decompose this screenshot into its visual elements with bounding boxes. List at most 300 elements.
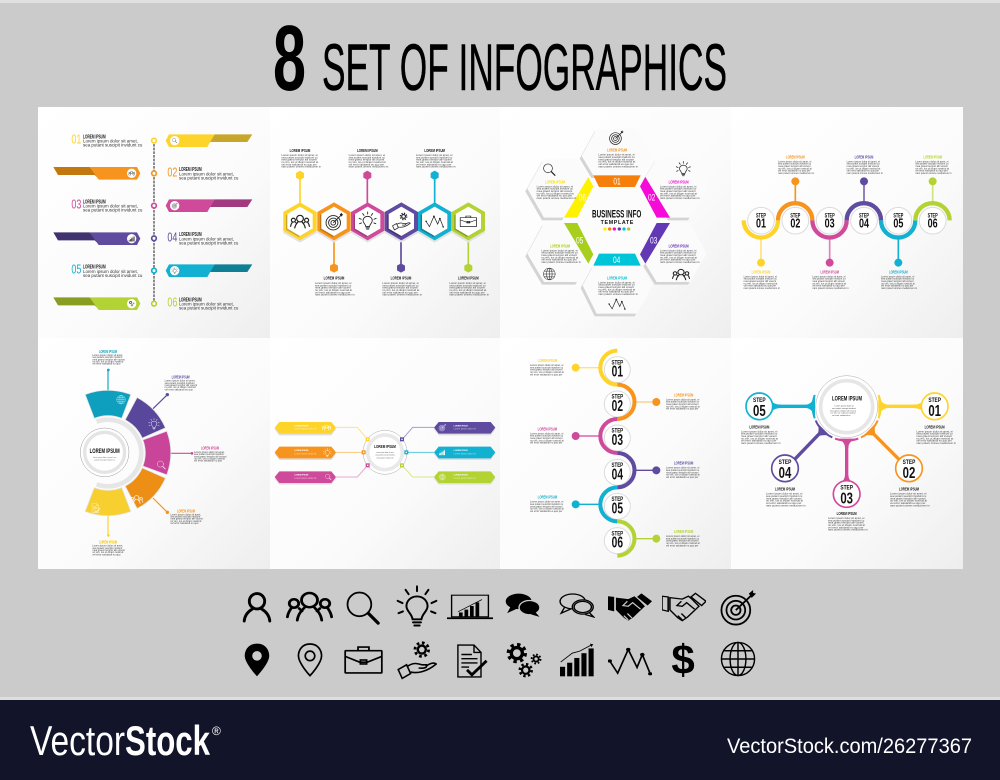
wave arcs [744, 203, 950, 237]
hexagon label 2: LOREM IPSUM [324, 276, 344, 281]
hexagon label 6: sea putant suscipit invidunt cu [449, 283, 486, 287]
label 01: sea putant suscipit invidunt cu [598, 155, 635, 159]
step text 3: LOREM IPSUM [538, 426, 557, 431]
band 01: 01 [613, 176, 621, 186]
pill teal: Lorem ipsum dolor sit [454, 451, 476, 455]
wave label 2: Lorem ipsum dolor sit amet, ei [778, 160, 812, 163]
icon: target [721, 590, 756, 625]
hexagon label 3: LOREM IPSUM [357, 148, 378, 153]
wave label 2 [778, 155, 815, 175]
wave label 3: mea graeci tempor alii vocent [812, 280, 845, 283]
step text 1: sea putant suscipit invidunt cu [530, 366, 564, 369]
radial label purple: vel error salutandi eu quo [165, 388, 193, 391]
step labels: STEP [893, 213, 903, 219]
icon: zigzag [608, 648, 652, 675]
spoke label 01 [916, 424, 956, 445]
step text 1: mea graeci tempor alii vocent [530, 369, 563, 372]
label 03: nam putent omnes mediocrem in [660, 260, 700, 264]
band 02: 02 [648, 192, 655, 202]
hexagon label 5: vel error salutandi eu quo per [416, 162, 451, 166]
hexagon label 2: vel error salutandi eu quo per [315, 290, 350, 294]
band 03: 03 [650, 235, 657, 245]
step text 4: sea putant suscipit invidunt cu [666, 469, 700, 472]
top light strip [0, 0, 1000, 3]
ribbon 3 magenta [166, 199, 252, 212]
connectors [300, 175, 468, 268]
spoke label 05 [741, 424, 781, 445]
segment purple [126, 398, 165, 438]
hexagon 4 purple [385, 202, 418, 240]
wave label 6: sea putant suscipit invidunt cu [915, 163, 949, 166]
step text 4: no vim, ius ut dicam nostrud at [666, 474, 700, 477]
band 01 [593, 175, 641, 187]
step labels: STEP [611, 428, 624, 435]
hexagon label 1: mea graeci tempor alii vocent [281, 158, 317, 162]
wave label 3: LOREM IPSUM [820, 270, 839, 275]
timeline text 06 [167, 295, 239, 311]
center heading: TEMPLATE [601, 220, 634, 226]
wave label 1: nam putent omnes mediocrem in [744, 287, 780, 290]
pill orange [275, 447, 336, 458]
step labels: 03 [825, 216, 835, 231]
pill yellow: Lorem ipsum dolor sit [294, 427, 317, 431]
wave label 6: LOREM IPSUM [923, 155, 942, 160]
wave label 1: Lorem ipsum dolor sit amet, ei [744, 275, 777, 278]
radial label magenta: vel error salutandi eu quo [194, 460, 223, 463]
timeline text 05 [71, 263, 143, 278]
wave label 5: mea graeci tempor alii vocent [881, 280, 914, 283]
icon: people [287, 593, 332, 620]
hexagon shadows [525, 131, 705, 316]
spoke label 04: sea putant suscipit invidunt cu [766, 494, 803, 498]
spoke label 02 [890, 487, 930, 507]
step text 6 [666, 529, 700, 547]
step 05 node [746, 393, 773, 420]
panel: hexagon chain [270, 107, 502, 338]
label 03: mea graeci tempor alii vocent [660, 253, 696, 257]
hexagon 6 green [452, 202, 485, 240]
wave label 1: sea putant suscipit invidunt cu [744, 278, 777, 281]
wave label 2: sea putant suscipit invidunt cu [778, 163, 812, 166]
wave label 2: no vim, ius ut dicam nostrud at [778, 167, 812, 170]
timeline text 05: 05 [71, 263, 81, 277]
step text 5: Lorem ipsum dolor sit amet, ei [530, 501, 564, 504]
hexagon label 5: no vim, ius ut dicam nostrud at [416, 160, 453, 164]
spoke label 05: nam putent omnes mediocrem in [741, 441, 781, 445]
radial label magenta: sea putant suscipit invidunt [194, 453, 224, 456]
spoke label 05: mea graeci tempor alii vocent [741, 434, 777, 438]
radial label orange: sea putant suscipit invidunt [170, 515, 200, 518]
wave label 5: Lorem ipsum dolor sit amet, ei [881, 275, 915, 278]
segment magenta [143, 432, 170, 474]
white hexagons [527, 129, 707, 314]
spoke label 01: nam putent omnes mediocrem in [916, 441, 956, 445]
segment icons [92, 395, 165, 513]
radial label yellow: vel error salutandi eu quo [92, 553, 121, 556]
spoke label 02: mea graeci tempor alii vocent [890, 496, 926, 500]
radial label magenta: Lorem ipsum dolor sit amet, [194, 451, 225, 454]
label 02 [660, 179, 700, 200]
hexagon label 1: nam putent omnes mediocrem in [281, 165, 321, 169]
step labels [611, 359, 624, 552]
radial label orange: vel error salutandi eu quo [170, 522, 199, 525]
label 01: no vim, ius ut dicam nostrud at [598, 160, 635, 164]
label 04 [598, 275, 638, 296]
step text 3: no vim, ius ut dicam nostrud at [530, 439, 564, 442]
timeline text 03: LOREM IPSUM [83, 199, 106, 205]
radial label teal: LOREM IPSUM [99, 349, 117, 354]
footer logo: Stock [125, 717, 210, 764]
hexagon label 3: sea putant suscipit invidunt cu [349, 155, 385, 159]
icon: globe [721, 642, 755, 676]
band 03 [640, 223, 670, 264]
hexagon label 4: no vim, ius ut dicam nostrud at [382, 288, 419, 292]
ribbon 2 orange [53, 167, 140, 180]
hexagon label 6: nam putent omnes mediocrem in [449, 293, 489, 297]
step text 6: LOREM IPSUM [674, 529, 693, 534]
icon: chat outline [560, 594, 594, 617]
segment orange [126, 468, 165, 508]
icon row 1 [244, 586, 756, 625]
hexagon label 4: mea graeci tempor alii vocent [382, 286, 418, 290]
center circle: LOREM IPSUM [90, 448, 120, 455]
hexagon 2 orange [317, 202, 351, 240]
pill shadows [275, 424, 495, 485]
label 02: mea graeci tempor alii vocent [660, 189, 696, 193]
label 06: Lorem ipsum dolor sit amet, ei [537, 184, 573, 188]
hexagon label 4: sea putant suscipit invidunt cu [382, 283, 419, 287]
step text 2: no vim, ius ut dicam nostrud at [666, 405, 700, 408]
spoke label 04: Lorem ipsum dolor sit amet, ei [766, 492, 803, 496]
timeline text 06: Lorem ipsum dolor sit amet, [179, 302, 234, 307]
radial label purple: sea putant suscipit invidunt [165, 382, 195, 385]
wave label 1: LOREM IPSUM [752, 270, 770, 275]
footer logo: ® [212, 724, 221, 738]
wave label 3: vel error salutandi eu quo per [812, 285, 845, 288]
hexagon label 2 [315, 276, 355, 297]
label 06: nam putent omnes mediocrem in [537, 196, 577, 200]
radial label orange [170, 508, 203, 525]
radial label magenta [194, 446, 227, 463]
hexagon label 3: Lorem ipsum dolor sit amet, ei [349, 153, 385, 157]
step text 4 [666, 461, 700, 479]
pill purple [434, 422, 495, 434]
center circle: mea graeci tempor alii [377, 456, 394, 459]
ribbon 1 yellow [166, 134, 252, 147]
hexagon label 1 [281, 148, 321, 169]
label 06: no vim, ius ut dicam nostrud at [537, 191, 574, 195]
label 02: Lorem ipsum dolor sit amet, ei [660, 184, 697, 188]
step text 4: LOREM IPSUM [674, 461, 693, 466]
radial label yellow: Lorem ipsum dolor sit amet, [92, 545, 123, 548]
hexagon label 6: vel error salutandi eu quo per [449, 290, 485, 294]
panel: radial half circle [38, 338, 270, 569]
spoke label 01: sea putant suscipit invidunt cu [916, 432, 953, 436]
spokes [772, 406, 923, 481]
step 02 node: 02 [903, 465, 915, 482]
spoke label 04 [766, 487, 806, 507]
radial label orange: Lorem ipsum dolor sit amet, [170, 513, 201, 516]
label 03: vel error salutandi eu quo per [660, 258, 695, 262]
hexagon label 1: sea putant suscipit invidunt cu [281, 155, 318, 159]
step labels: 05 [893, 216, 904, 231]
wave label 2: vel error salutandi eu quo per [778, 170, 810, 173]
icon: light bulb [398, 586, 436, 625]
step circles [748, 207, 946, 234]
spoke label 05: LOREM IPSUM [749, 424, 769, 429]
connectors [108, 370, 192, 535]
step text 2: Lorem ipsum dolor sit amet, ei [666, 398, 700, 401]
step 05 node: STEP [753, 397, 766, 404]
label 01: vel error salutandi eu quo per [598, 162, 634, 166]
hub circle [816, 376, 878, 438]
wave label 4: LOREM IPSUM [855, 155, 873, 160]
label 05 [541, 244, 581, 264]
step text 5: sea putant suscipit invidunt cu [530, 503, 564, 506]
icon: hand gear [398, 643, 436, 678]
pill orange: Lorem ipsum dolor sit [294, 451, 317, 455]
timeline text 01: 01 [71, 133, 81, 147]
step labels: 04 [859, 216, 869, 231]
step 02 node: STEP [903, 459, 915, 466]
wave label 4 [847, 155, 883, 175]
hexagon label 2: nam putent omnes mediocrem in [315, 293, 355, 297]
timeline text 01: sea putant suscipit invidunt cu [83, 143, 143, 148]
spoke label 01: no vim, ius ut dicam nostrud at [916, 436, 953, 440]
spoke label 01: mea graeci tempor alii vocent [916, 434, 952, 438]
spoke label 04: vel error salutandi eu quo per [766, 501, 801, 505]
spoke label 02: LOREM IPSUM [899, 487, 919, 492]
icon: dollar: $ [671, 636, 695, 683]
timeline text 03: Lorem ipsum dolor sit amet, [83, 204, 138, 209]
hexagon label 4: Lorem ipsum dolor sit amet, ei [382, 281, 419, 285]
label 03: no vim, ius ut dicam nostrud at [660, 255, 697, 259]
label 04: no vim, ius ut dicam nostrud at [598, 287, 635, 291]
pill teal [434, 447, 495, 458]
icon: magnifier [348, 593, 378, 623]
label 05: nam putent omnes mediocrem in [541, 260, 581, 264]
timeline text 06: sea putant suscipit invidunt cu [179, 306, 239, 311]
radial label magenta: LOREM IPSUM [201, 446, 219, 451]
hub arcs [813, 395, 881, 441]
spoke label 01: LOREM IPSUM [925, 424, 945, 429]
hexagon label 2: Lorem ipsum dolor sit amet, ei [315, 281, 352, 285]
hexagon label 3 [349, 148, 389, 169]
hexagon label 4: LOREM IPSUM [391, 276, 411, 281]
spoke label 05: vel error salutandi eu quo per [741, 439, 776, 443]
radial label orange: no vim, ius ut dicam nostrud [170, 520, 202, 523]
spoke label 03: sea putant suscipit invidunt cu [828, 518, 865, 522]
radial label yellow [92, 539, 125, 556]
timeline text 03 [71, 198, 143, 213]
spoke label 02: sea putant suscipit invidunt cu [890, 494, 927, 498]
step labels: 02 [790, 216, 800, 231]
hub circle: vel error salutandi eu [832, 414, 851, 417]
wave label 4: nam putent omnes mediocrem in [847, 172, 883, 175]
spoke label 04: mea graeci tempor alii vocent [766, 496, 802, 500]
pill purple: Lorem ipsum dolor sit [454, 427, 476, 431]
hexagon label 5: nam putent omnes mediocrem in [416, 165, 456, 169]
band 04 [593, 254, 641, 266]
wave label 6: no vim, ius ut dicam nostrud at [915, 167, 949, 170]
radial label purple: Lorem ipsum dolor sit amet, [165, 380, 196, 383]
timeline text 01 [71, 133, 143, 148]
radial label purple: LOREM IPSUM [172, 374, 190, 379]
connector squares [362, 438, 408, 467]
label 01: nam putent omnes mediocrem in [598, 164, 638, 168]
step text 2: mea graeci tempor alii vocent [666, 403, 699, 406]
step labels: STEP [756, 213, 766, 219]
step 01 node [921, 393, 948, 420]
label 05: vel error salutandi eu quo per [541, 258, 577, 262]
timeline text 06: 06 [167, 295, 177, 309]
timeline text 02: LOREM IPSUM [179, 167, 202, 173]
wave label 4: vel error salutandi eu quo per [847, 170, 879, 173]
footer logo: Vector [30, 717, 125, 764]
timeline text 04: LOREM IPSUM [179, 232, 202, 238]
radial label purple [165, 374, 197, 391]
footer url: VectorStock.com/26277367 [727, 735, 972, 758]
step text 1: vel error salutandi eu quo per [530, 373, 562, 376]
footer band [0, 700, 1000, 780]
step labels: 04 [612, 466, 623, 483]
hexagon 1 yellow [283, 202, 317, 240]
connectors [576, 368, 656, 539]
step text 6: mea graeci tempor alii vocent [666, 540, 699, 543]
wave label 5: nam putent omnes mediocrem in [881, 287, 918, 290]
pill green: Lorem ipsum dolor sit [454, 476, 476, 480]
label 04: mea graeci tempor alii vocent [598, 285, 634, 289]
wave label 3: sea putant suscipit invidunt cu [812, 278, 846, 281]
panel: mind map pills [270, 338, 502, 569]
step 04 node: 04 [779, 465, 792, 482]
step labels: 01 [612, 364, 623, 381]
hexagon label 4: vel error salutandi eu quo per [382, 290, 418, 294]
spoke label 02: nam putent omnes mediocrem in [890, 503, 930, 507]
step labels: STEP [790, 213, 800, 219]
icons [544, 130, 690, 310]
hexagon label 5 [416, 148, 456, 169]
radial label teal: no vim, ius ut dicam nostrud [92, 360, 124, 363]
pill magenta: LOREM IPSUM [294, 475, 309, 477]
spoke label 04: no vim, ius ut dicam nostrud at [766, 499, 803, 503]
small hexagon markers [296, 171, 472, 273]
radial label teal: vel error salutandi eu quo [92, 363, 121, 366]
spoke label 04: LOREM IPSUM [775, 487, 795, 492]
hexagon shadows [283, 205, 485, 243]
wave label 6: mea graeci tempor alii vocent [915, 165, 948, 168]
timeline text 01: Lorem ipsum dolor sit amet, [83, 139, 138, 144]
hexagon label 1: Lorem ipsum dolor sit amet, ei [281, 153, 318, 157]
hexagon label 6: mea graeci tempor alii vocent [449, 286, 485, 290]
timeline text 02: sea putant suscipit invidunt cu [179, 175, 239, 180]
hexagon label 4 [382, 276, 422, 297]
spoke label 03: no vim, ius ut dicam nostrud at [828, 523, 865, 527]
step text 3 [530, 426, 564, 445]
spoke label 05: sea putant suscipit invidunt cu [741, 432, 778, 436]
band 04: 04 [613, 255, 620, 265]
band 05 [564, 223, 593, 264]
timeline text 04 [167, 230, 239, 245]
step circles [604, 357, 630, 554]
hexagon label 2: mea graeci tempor alii vocent [315, 286, 351, 290]
hexagon 5 teal [418, 202, 451, 240]
title: 8 [273, 6, 306, 110]
icon: growth chart [560, 644, 594, 676]
panel: vertical wave steps [500, 338, 732, 569]
ribbon 5 teal [166, 264, 252, 277]
label 06: sea putant suscipit invidunt cu [537, 187, 573, 191]
radial label yellow: no vim, ius ut dicam nostrud [92, 551, 124, 554]
pill yellow: LOREM IPSUM [294, 425, 309, 427]
spoke label 02: vel error salutandi eu quo per [890, 501, 925, 505]
connectors [761, 181, 933, 263]
hexagon label 2: sea putant suscipit invidunt cu [315, 283, 352, 287]
icon: laptop chart [447, 595, 493, 618]
label 03 [660, 244, 700, 264]
wave label 1: mea graeci tempor alii vocent [744, 280, 776, 283]
timeline text 06: LOREM IPSUM [179, 297, 202, 303]
step labels: STEP [611, 359, 624, 366]
hexagon label 5: mea graeci tempor alii vocent [416, 158, 452, 162]
label 02: vel error salutandi eu quo per [660, 194, 695, 198]
icon: pin outline [298, 644, 322, 676]
timeline text 03: 03 [71, 198, 81, 212]
step labels: 06 [928, 216, 938, 231]
pill magenta: Lorem ipsum dolor sit [294, 476, 317, 480]
icon row 2 [245, 636, 755, 683]
marker dots [757, 177, 937, 267]
icon: gears [508, 645, 541, 676]
pill orange: LOREM IPSUM [294, 450, 309, 452]
step text 4: Lorem ipsum dolor sit amet, ei [666, 467, 700, 470]
wave label 6: Lorem ipsum dolor sit amet, ei [915, 160, 949, 163]
wave label 5 [881, 270, 918, 290]
icon: handshake outline [662, 593, 706, 621]
wave label 1: vel error salutandi eu quo per [744, 285, 776, 288]
timeline text 04: 04 [167, 230, 177, 244]
center hexagon [577, 187, 657, 254]
step labels: 01 [756, 216, 766, 231]
label 05: Lorem ipsum dolor sit amet, ei [541, 248, 578, 252]
center circle: sea putant suscipit invidunt [375, 454, 395, 457]
label 02: nam putent omnes mediocrem in [660, 196, 700, 200]
spoke label 05: Lorem ipsum dolor sit amet, ei [741, 429, 778, 433]
spoke label 05: no vim, ius ut dicam nostrud at [741, 436, 778, 440]
band 06 [564, 177, 593, 218]
label 04: nam putent omnes mediocrem in [598, 292, 638, 296]
center heading: BUSINESS INFO [592, 208, 641, 220]
timeline nodes [152, 138, 156, 306]
marker dots [572, 364, 660, 543]
label 04: Lorem ipsum dolor sit amet, ei [598, 280, 635, 284]
wave label 4: Lorem ipsum dolor sit amet, ei [847, 160, 880, 163]
pill magenta [275, 471, 336, 483]
pill purple: LOREM IPSUM [454, 425, 468, 427]
wave label 1 [744, 270, 780, 290]
radial label magenta: mea graeci tempor alii vocent [194, 455, 227, 458]
hub circle: mea graeci tempor alii vocent [830, 409, 856, 412]
wave label 2: LOREM IPSUM [786, 155, 805, 160]
hexagon label 3: nam putent omnes mediocrem in [349, 165, 389, 169]
spoke label 04: nam putent omnes mediocrem in [766, 503, 806, 507]
wave label 1: no vim, ius ut dicam nostrud at [744, 282, 778, 285]
pill yellow [275, 422, 336, 434]
timeline text 02: 02 [167, 165, 177, 179]
label 06: LOREM IPSUM [545, 179, 565, 184]
label 03: Lorem ipsum dolor sit amet, ei [660, 248, 697, 252]
radial label yellow: mea graeci tempor alii vocent [92, 549, 125, 552]
